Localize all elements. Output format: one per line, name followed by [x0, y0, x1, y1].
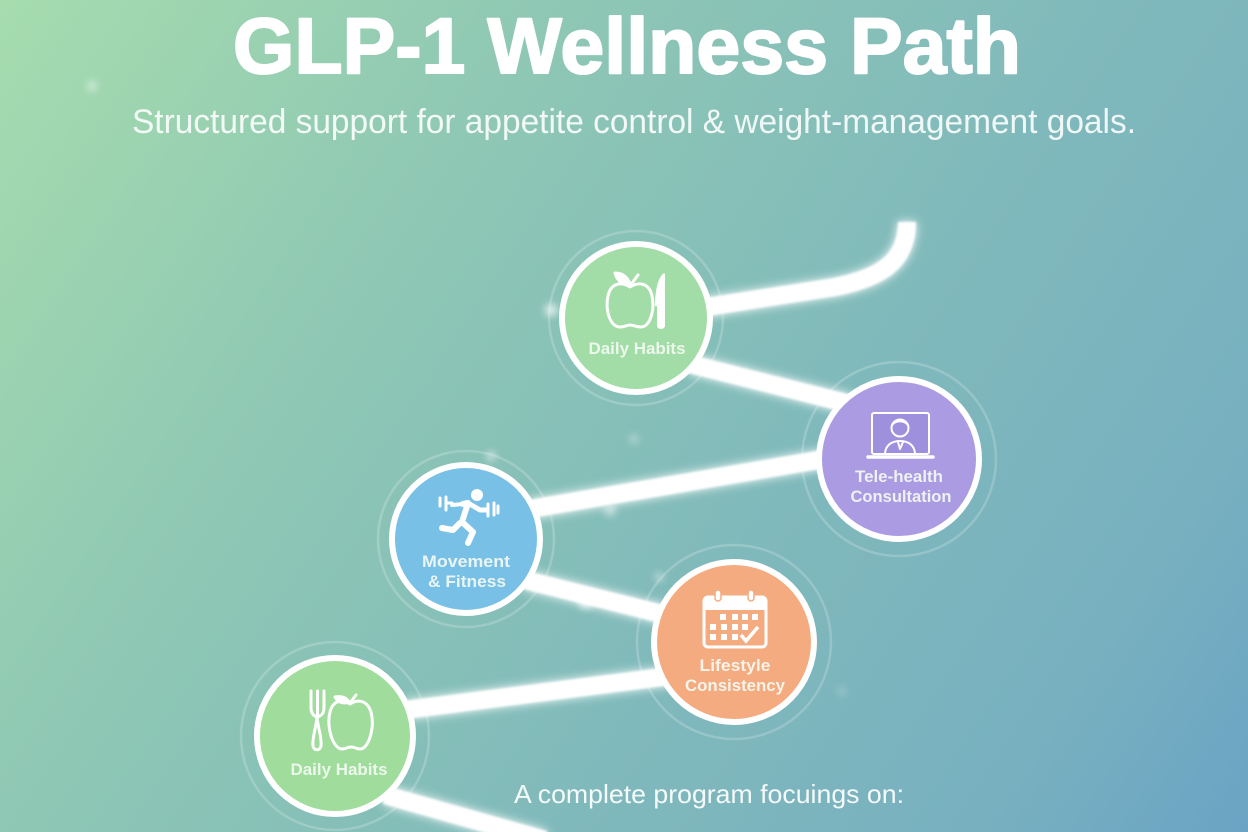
label: Daily Habits	[290, 760, 388, 779]
icon: fork and apple	[311, 691, 372, 750]
step: Lifestyle Consistency: Consistency	[685, 676, 786, 695]
title: GLP-1 Wellness Path	[233, 1, 1021, 90]
label: Movement	[422, 552, 510, 571]
label: Daily Habits	[588, 339, 686, 358]
icon: apple and knife	[607, 273, 665, 329]
subtitle: Structured support for appetite control & weight-management goals.	[132, 103, 1136, 141]
step: Tele-health Consultation	[802, 362, 996, 556]
caption: A complete program focuings on:	[514, 779, 904, 809]
label: Lifestyle	[700, 656, 770, 675]
icon: doctor on laptop	[868, 413, 933, 457]
step: Daily Habits (bottom)	[241, 642, 429, 830]
step: Lifestyle Consistency	[637, 545, 831, 739]
winding path	[385, 222, 907, 832]
step: Tele-health Consultation: Consultation	[850, 487, 952, 506]
label: Tele-health	[855, 467, 943, 486]
icon: runner with dumbbells	[440, 489, 498, 543]
icon: calendar with check	[704, 590, 766, 647]
step: Daily Habits (top)	[549, 231, 723, 405]
step: Movement & Fitness	[378, 451, 554, 627]
step: Movement & Fitness: & Fitness	[428, 572, 506, 591]
sparkles	[87, 81, 846, 695]
